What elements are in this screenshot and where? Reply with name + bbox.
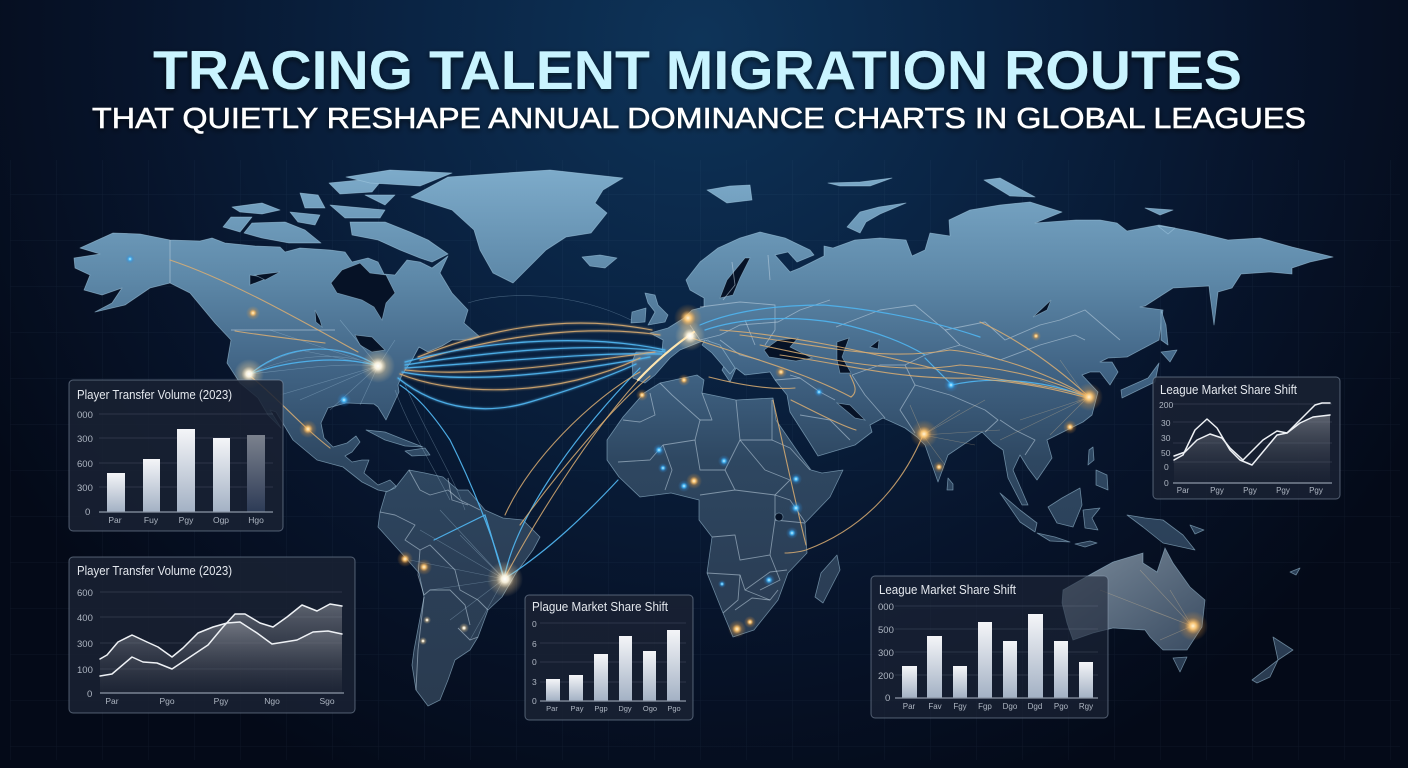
y axis labels: 200 [1159, 400, 1173, 410]
x axis labels: Hgo [248, 515, 264, 525]
migration routes: Europe to Asia [638, 305, 1088, 553]
x axis labels: Pgo [667, 704, 681, 713]
panel title: League Market Share Shift [879, 582, 1016, 597]
x axis labels [546, 704, 681, 713]
y axis labels: 3 [532, 677, 537, 687]
line chart [100, 604, 342, 693]
x axis labels [1177, 486, 1323, 495]
migration routes: Atlantic bundle [398, 323, 665, 409]
panel title: League Market Share Shift [1160, 382, 1297, 397]
panel: league market share bar chart [871, 576, 1108, 718]
y axis labels: 0 [1164, 462, 1169, 472]
y axis labels: 300 [77, 639, 93, 650]
panel title: Plague Market Share Shift [532, 599, 668, 614]
continent: Africa [607, 375, 843, 637]
x axis labels: Fgy [953, 702, 967, 711]
x axis labels: Pgy [1243, 486, 1257, 495]
y axis labels: 0 [885, 693, 890, 704]
x axis labels: Dgy [618, 704, 632, 713]
x axis labels: Pgo [1054, 702, 1069, 711]
x axis labels: Pgo [159, 696, 175, 706]
x axis labels: Ogo [643, 704, 657, 713]
y axis labels: 600 [77, 459, 93, 470]
y axis labels: 30 [1161, 433, 1171, 443]
y axis labels: 0 [87, 689, 92, 700]
bars [546, 630, 680, 701]
x axis labels: Pgy [1276, 486, 1290, 495]
x axis labels: Dgo [1003, 702, 1018, 711]
x axis labels [903, 702, 1093, 711]
y axis labels: 200 [878, 671, 894, 682]
line chart [1174, 403, 1330, 483]
x axis labels: Par [105, 696, 119, 706]
title: TRACING TALENT MIGRATION ROUTES [153, 39, 1242, 101]
panel: plague market share bar chart [525, 595, 693, 720]
x axis labels: Dgd [1028, 702, 1042, 711]
y axis labels [77, 410, 93, 518]
y axis labels: 000 [878, 602, 894, 613]
location glows [125, 254, 1208, 645]
x axis labels: Pgp [594, 704, 608, 713]
y axis labels: 500 [878, 625, 894, 636]
y axis labels [878, 602, 894, 704]
x axis labels: Pay [571, 704, 584, 713]
x axis labels: Pgy [1210, 486, 1224, 495]
y axis labels: 50 [1161, 448, 1171, 458]
continent: South America [378, 470, 540, 706]
continent: North America [74, 170, 623, 492]
y axis labels [77, 588, 93, 700]
y axis labels: 100 [77, 665, 93, 676]
migration routes: Americas [170, 260, 378, 448]
panel: player transfer volume line chart [69, 557, 355, 713]
x axis labels: Sgo [319, 696, 335, 706]
continent: Australia and New Zealand [1062, 548, 1300, 683]
x axis labels: Pgy [1309, 486, 1323, 495]
panel title: Player Transfer Volume (2023) [77, 387, 232, 402]
migration routes: South America to Europe [400, 368, 650, 579]
x axis labels: Par [546, 704, 558, 713]
panel title: Player Transfer Volume (2023) [77, 563, 232, 578]
x axis labels: Fav [928, 702, 942, 711]
y axis labels: 0 [85, 507, 90, 518]
y axis labels: 300 [77, 483, 93, 494]
migration routes: faint fan lines [250, 296, 1192, 640]
world map [74, 170, 1333, 706]
y axis labels: 6 [532, 639, 537, 649]
y axis labels: 0 [532, 657, 537, 667]
y axis labels: 300 [77, 434, 93, 445]
x axis labels: Ngo [264, 696, 280, 706]
y axis labels [1159, 400, 1173, 488]
y axis labels: 600 [77, 588, 93, 599]
subtitle: THAT QUIETLY RESHAPE ANNUAL DOMINANCE CHARTS IN GLOBAL LEAGUES [92, 103, 1306, 135]
bars [902, 614, 1093, 698]
x axis labels: Ogp [213, 515, 229, 525]
y axis labels: 300 [878, 648, 894, 659]
y axis labels: 000 [77, 410, 93, 421]
y axis labels [532, 619, 537, 706]
x axis labels: Rgy [1079, 702, 1093, 711]
panel: player transfer volume bar chart [69, 380, 283, 531]
x axis labels: Fgp [978, 702, 992, 711]
y axis labels: 0 [1164, 478, 1169, 488]
x axis labels: Pgy [214, 696, 229, 706]
x axis labels [105, 696, 335, 706]
x axis labels: Par [1177, 486, 1190, 495]
x axis labels: Pgy [179, 515, 194, 525]
x axis labels: Fuy [144, 515, 159, 525]
y axis labels: 0 [532, 696, 537, 706]
continent: Eurasia [631, 178, 1333, 550]
y axis labels: 30 [1161, 418, 1171, 428]
x axis labels [108, 515, 264, 525]
y axis labels: 400 [77, 613, 93, 624]
y axis labels: 0 [532, 619, 537, 629]
x axis labels: Par [903, 702, 916, 711]
x axis labels: Par [108, 515, 122, 525]
bars [107, 429, 265, 512]
panel: league market share line chart [1153, 377, 1340, 499]
